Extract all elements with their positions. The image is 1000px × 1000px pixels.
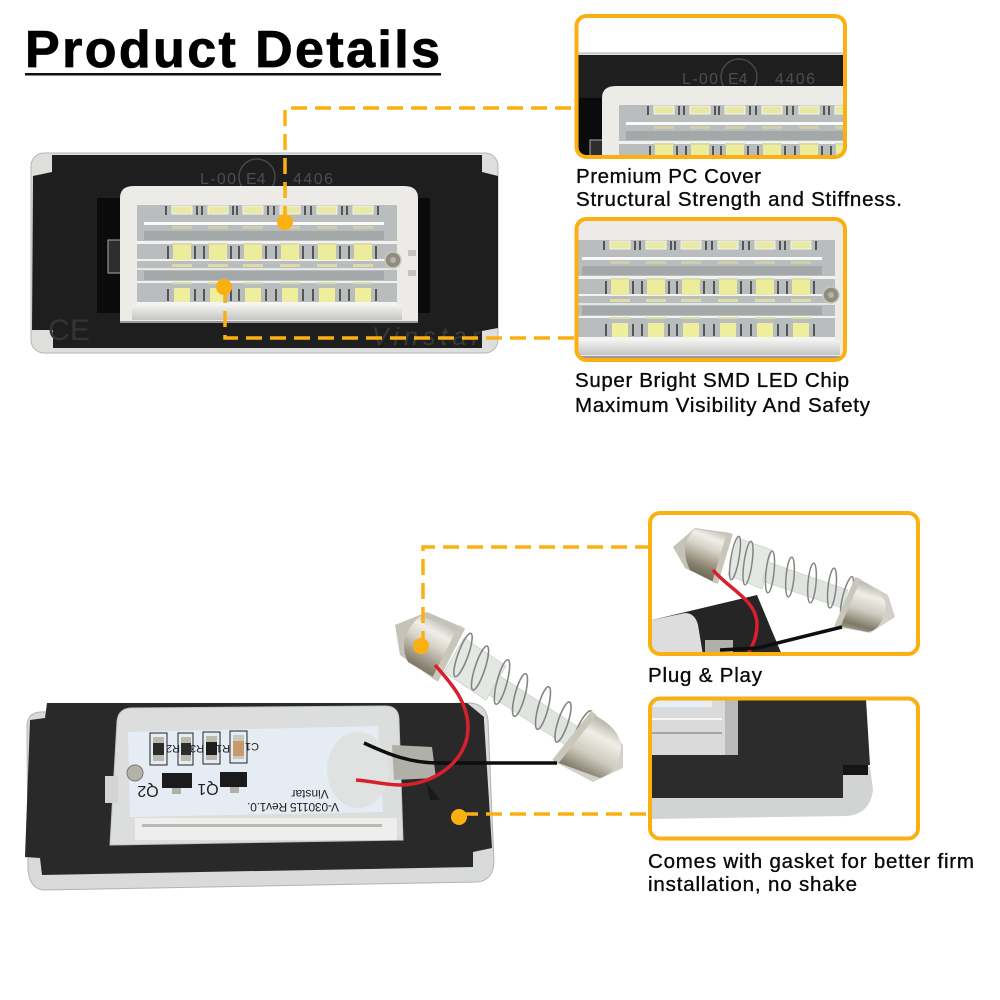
resistors and capacitor	[150, 731, 247, 765]
inset panel: SMD LED chip close-up	[574, 217, 847, 362]
circuit board	[128, 726, 383, 817]
board markings: V-030115 Rev1.0.	[247, 800, 339, 814]
caption: premium PC cover: Structural Strength and Stiffness.	[576, 188, 902, 211]
board markings	[137, 740, 339, 814]
caption: plug and play: Plug & Play	[648, 664, 763, 687]
caption: SMD LED chip: Super Bright SMD LED Chip	[575, 369, 849, 392]
inset panel: festoon bulb close-up	[650, 513, 918, 655]
caption: gasket	[648, 850, 974, 896]
callout connector: LED chip	[216, 279, 575, 338]
caption: premium PC cover	[576, 165, 902, 211]
caption: gasket: installation, no shake	[648, 873, 857, 896]
caption: premium PC cover: Premium PC Cover	[576, 165, 761, 188]
mounting screw	[127, 765, 143, 781]
product photo: lamp front with PC cover and LED chips	[31, 153, 498, 353]
caption: SMD LED chip: Maximum Visibility And Safety	[575, 394, 871, 417]
black wire	[364, 743, 557, 763]
board markings: Vinstar	[291, 787, 329, 801]
board markings: C1	[245, 740, 259, 752]
callout connector: plug and play	[413, 547, 650, 654]
inset panel: premium PC cover close-up	[574, 14, 847, 159]
silicone blob	[327, 732, 389, 808]
board markings: R3	[190, 742, 204, 754]
caption: SMD LED chip	[575, 369, 871, 417]
caption: gasket: Comes with gasket for better firm	[648, 850, 974, 873]
clear housing	[27, 703, 494, 890]
board markings: R2	[166, 742, 180, 754]
festoon bulb	[395, 612, 623, 782]
red wire	[356, 665, 468, 785]
board markings: R1	[216, 742, 230, 754]
inset panel: gasket close-up	[650, 698, 918, 838]
board markings: Q2	[137, 782, 159, 799]
foam gasket	[25, 703, 492, 875]
callout connector: gasket	[451, 809, 650, 825]
clear cover	[110, 706, 403, 845]
transistors	[162, 772, 247, 794]
callout connector: PC cover	[277, 108, 575, 230]
board markings: Q1	[197, 780, 219, 797]
title: Product Details	[25, 21, 440, 79]
product photo: lamp back with gasket, PCB and festoon bulb	[25, 612, 623, 890]
metal clip	[392, 745, 436, 780]
